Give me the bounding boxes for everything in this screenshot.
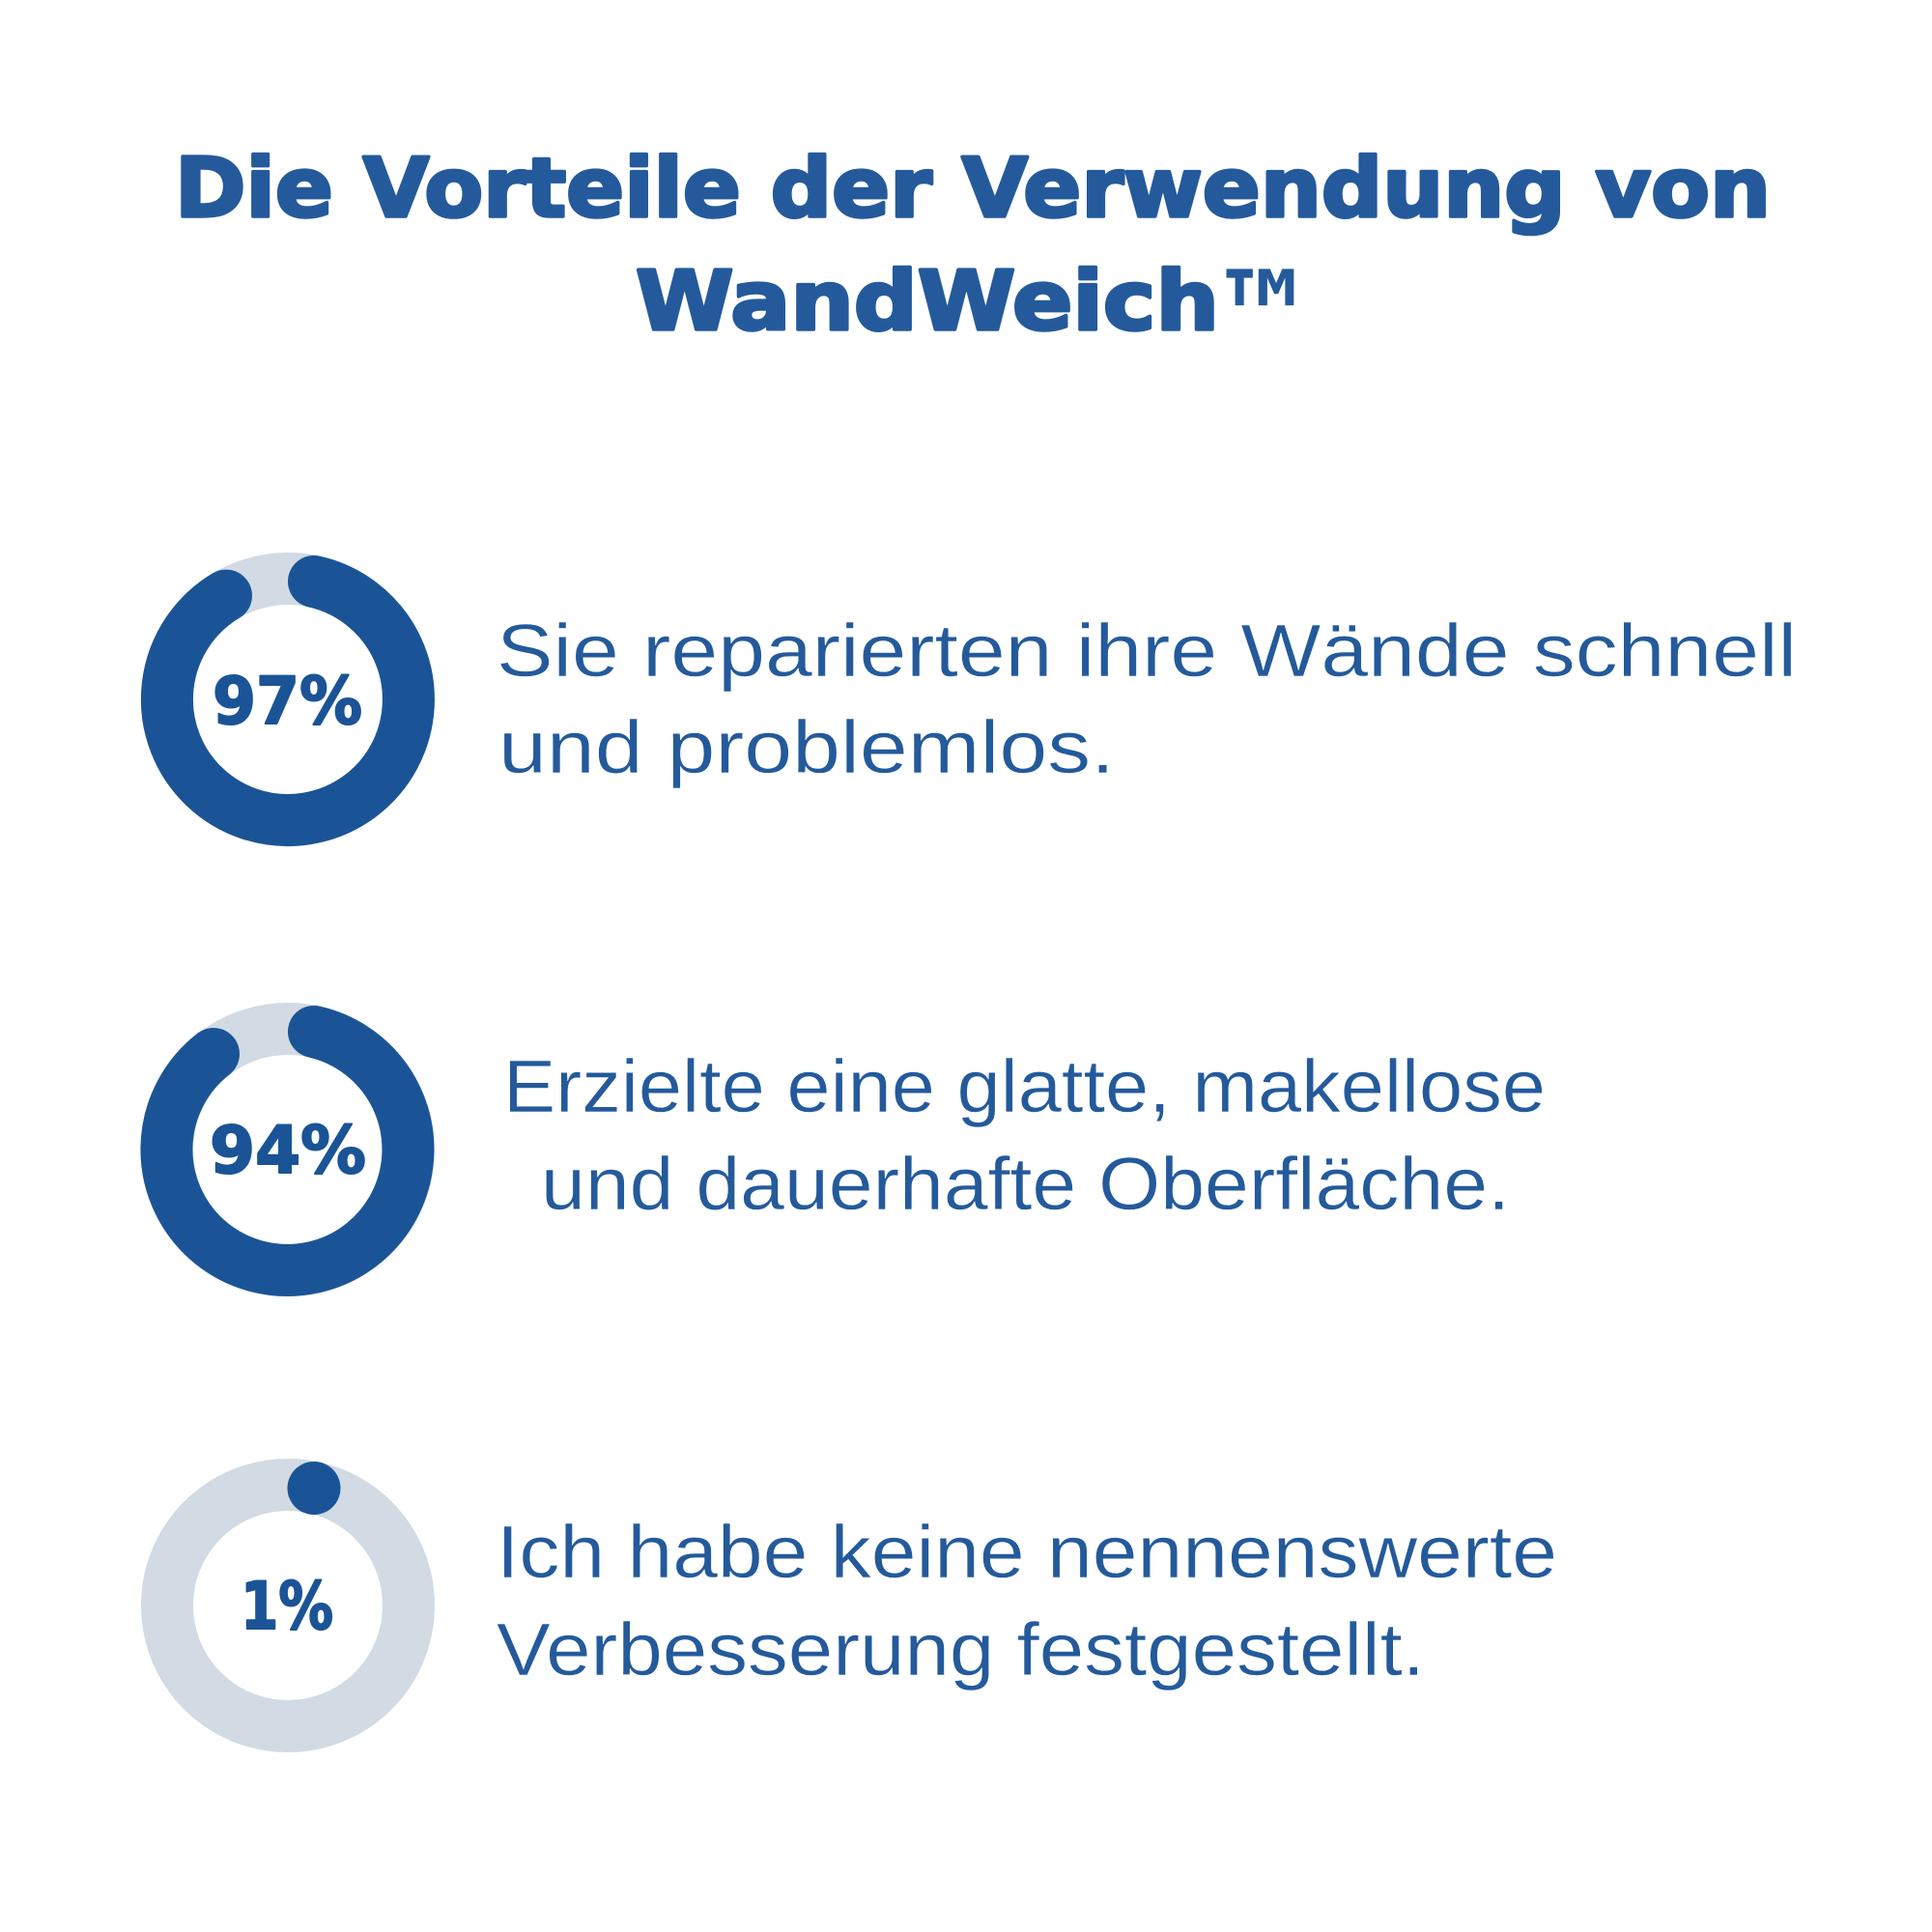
title: ™	[1211, 243, 1316, 394]
text block: 94 percent statement: Erzielte eine glatte, makellose	[503, 1045, 1546, 1128]
donut chart: 1%	[167, 1462, 409, 1726]
donut chart: 1%: 1%	[241, 1569, 333, 1645]
text block: 97 percent statement: Sie reparierten ihre Wände schnell	[497, 610, 1797, 693]
panel: 94 percent row	[166, 1029, 1546, 1270]
text block: 94 percent statement	[503, 1045, 1546, 1226]
donut chart: 94%: 94%	[210, 1113, 366, 1189]
text block: 97 percent statement	[497, 610, 1797, 789]
title: Die Vorteile der Verwendung von	[175, 141, 1771, 237]
text block: 1 percent statement: Ich habe keine nennenswerte	[497, 1511, 1557, 1594]
text block: 94 percent statement: und dauerhafte Oberfläche.	[541, 1143, 1510, 1226]
title	[175, 141, 1771, 394]
text block: 97 percent statement: und problemlos.	[498, 706, 1115, 789]
text block: 1 percent statement: Verbesserung festgestellt.	[497, 1608, 1425, 1691]
donut chart: 97%: 97%	[213, 664, 362, 740]
donut chart: 97%	[167, 579, 409, 820]
donut chart: 94%	[166, 1029, 409, 1270]
text block: 1 percent statement	[497, 1511, 1557, 1691]
title: WandWeich	[636, 254, 1219, 350]
panel: 97 percent row	[167, 579, 1797, 820]
panel: 1 percent row	[167, 1462, 1557, 1726]
